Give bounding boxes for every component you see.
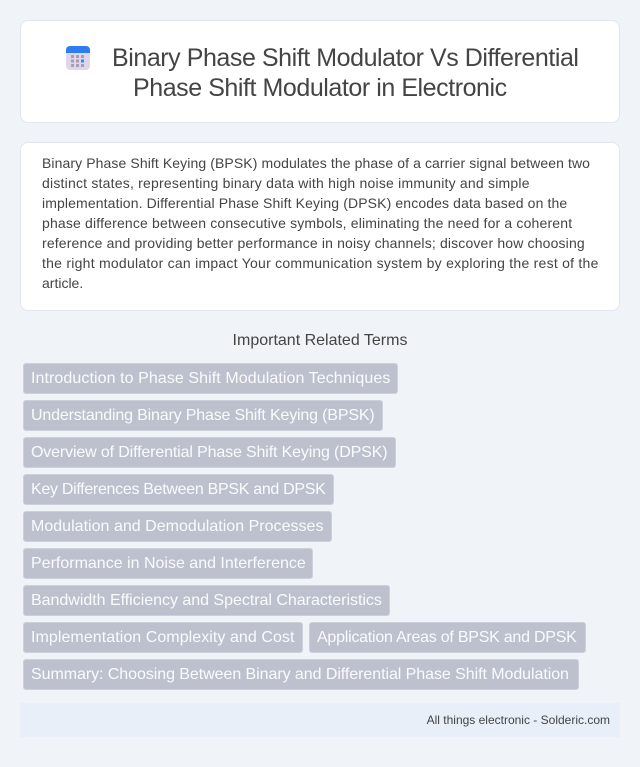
tag: Summary: Choosing Between Binary and Differential Phase Shift Modulation	[31, 666, 569, 683]
title	[112, 44, 579, 102]
intro text	[42, 155, 599, 291]
icon: calendar	[66, 46, 90, 70]
tag list	[23, 363, 586, 690]
intro text: reference and providing better performance in noisy channels; discover how choosing	[42, 235, 585, 251]
tag: Bandwidth Efficiency and Spectral Characteristics	[31, 592, 382, 609]
tag	[309, 622, 586, 653]
intro text: implementation. Differential Phase Shift Keying (DPSK) encodes data based on the	[42, 195, 567, 211]
tag	[23, 363, 398, 394]
tag	[23, 400, 383, 431]
intro text: distinct states, representing binary data with high noise immunity and simple	[42, 175, 530, 191]
tag	[23, 437, 396, 468]
tag: Introduction to Phase Shift Modulation Techniques	[31, 370, 390, 387]
title: Phase Shift Modulator in Electronic	[133, 74, 507, 102]
tag: Performance in Noise and Interference	[31, 555, 306, 572]
panel: intro paragraph	[20, 142, 620, 311]
tag	[23, 474, 334, 505]
tag	[23, 659, 579, 690]
tag: Implementation Complexity and Cost	[31, 629, 294, 646]
panel: title card	[20, 20, 620, 123]
tag: Understanding Binary Phase Shift Keying (BPSK)	[31, 407, 374, 424]
tag	[23, 622, 303, 653]
tag	[23, 511, 332, 542]
tag: Modulation and Demodulation Processes	[31, 518, 323, 535]
title: Binary Phase Shift Modulator Vs Differential	[112, 44, 579, 72]
intro text: article.	[42, 275, 83, 291]
footer	[20, 703, 620, 737]
intro text: the right modulator can impact Your communication system by exploring the rest of the	[42, 255, 599, 271]
footer: All things electronic - Solderic.com	[427, 713, 610, 727]
intro text: Binary Phase Shift Keying (BPSK) modulates the phase of a carrier signal between two	[42, 155, 590, 171]
tag	[23, 548, 313, 579]
tag: Key Differences Between BPSK and DPSK	[31, 481, 326, 498]
heading: important related terms: Important Related Terms	[233, 332, 407, 349]
intro text: phase difference between consecutive symbols, eliminating the need for a coherent	[42, 215, 572, 231]
tag: Overview of Differential Phase Shift Keying (DPSK)	[31, 444, 387, 461]
tag: Application Areas of BPSK and DPSK	[317, 629, 577, 646]
tag	[23, 585, 390, 616]
